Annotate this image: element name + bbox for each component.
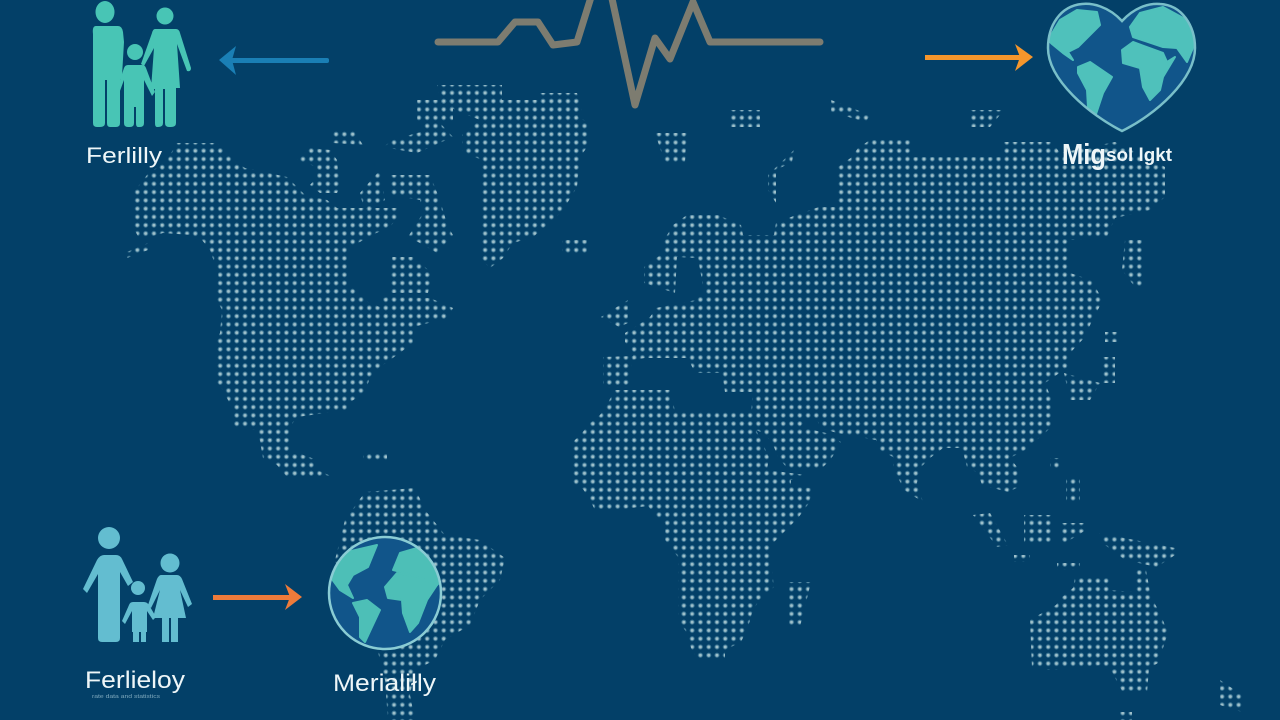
- label: migration top: Mig: [1062, 139, 1106, 171]
- label: fertility bottom: Ferlieloy: [85, 667, 185, 694]
- arrow: orange pointing right top: [925, 44, 1033, 71]
- dotted world map: [127, 85, 1242, 720]
- map: Greenland: [437, 85, 590, 268]
- icon: round globe: [329, 537, 442, 649]
- icon: family bottom left: [83, 527, 192, 642]
- icon: heart-shaped globe: [1048, 4, 1195, 131]
- label: mortality bottom: Merialiłly: [333, 670, 436, 697]
- label: migration top: sol lgkt: [1106, 145, 1172, 165]
- map: Southeast Asia islands: [973, 458, 1175, 570]
- arrow: blue pointing left: [219, 46, 329, 75]
- map: Australia and New Zealand: [1030, 570, 1242, 720]
- pulse line: [438, 0, 820, 105]
- arrow: orange pointing right bottom: [213, 584, 302, 610]
- map: northern islands: [601, 100, 1143, 400]
- map: Eurasia and Africa: [573, 140, 1165, 660]
- map: South America: [335, 488, 505, 720]
- label: migration top: [1062, 139, 1172, 171]
- map: North America: [127, 100, 453, 477]
- caption: small text under fertility: rate data and statistics: [92, 694, 161, 700]
- icon: family top left: [93, 1, 191, 127]
- label: fertility top: Ferlilly: [86, 143, 162, 168]
- map: Madagascar: [789, 582, 811, 627]
